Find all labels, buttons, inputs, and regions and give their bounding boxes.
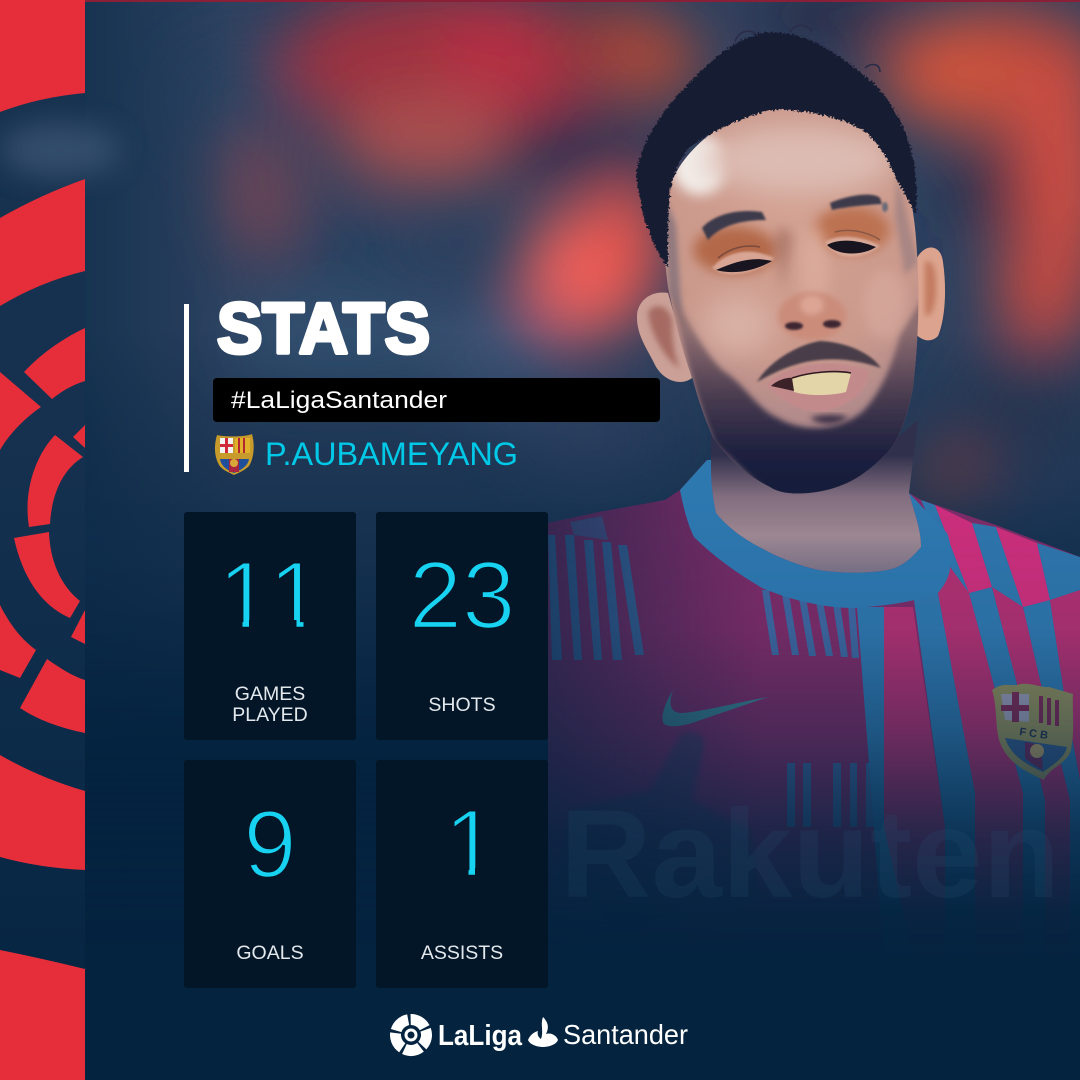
stat card: assists: 1 [444, 790, 497, 897]
stat card: goals: 9 [243, 791, 297, 898]
stat card: games played: PLAYED [232, 704, 308, 726]
title: STATS: STATS [217, 290, 430, 369]
player: neck [711, 420, 921, 573]
stat card: games played: GAMES [235, 683, 305, 705]
player photo: Aubameyang [548, 25, 1080, 980]
wordmark: LaLiga: LaLiga [438, 1020, 523, 1052]
bottom fade over player [85, 500, 1080, 1080]
player: collar [680, 460, 951, 608]
player name: P.AUBAMEYANG [265, 436, 518, 472]
hashtag bar [213, 378, 660, 422]
player: hair [636, 25, 917, 268]
jersey stripes: centre [857, 607, 894, 884]
player: eyes [712, 230, 880, 274]
jersey crest: FC Barcelona: F C B [1019, 726, 1049, 742]
player: left ear [637, 292, 692, 382]
stat card: games played [184, 512, 356, 740]
icon: Santander flame [528, 1017, 558, 1047]
player: eyebrows [702, 195, 888, 240]
header block [184, 290, 660, 475]
stat card: games played: 11 [218, 542, 326, 649]
player: nose [778, 292, 846, 340]
player: head [665, 108, 918, 494]
icon: LaLiga ball [391, 1015, 431, 1055]
white accent bar [184, 304, 189, 472]
jersey: hand ghost [604, 731, 731, 841]
wordmark: Santander: Santander [563, 1019, 688, 1050]
jersey stripes: right shoulder [921, 500, 969, 593]
jersey sponsor text: Rakuten [560, 785, 1060, 924]
stat card: shots [376, 512, 548, 740]
stat card: goals: GOALS [236, 942, 304, 964]
club crest: FC Barcelona [215, 434, 254, 475]
left strip: LaLiga red emblem pattern [0, 0, 120, 1080]
jersey crest: FC Barcelona [992, 684, 1073, 780]
stat card: shots: SHOTS [428, 694, 496, 716]
jersey: nike swoosh [662, 690, 768, 726]
jersey: left side shading [548, 490, 735, 872]
stat card: shots: 23 [409, 542, 515, 649]
stat card: assists [376, 760, 548, 988]
player: jersey [548, 460, 1080, 906]
player: right ear [914, 248, 945, 340]
footer logo: LaLiga Santander [391, 1015, 688, 1055]
player: mouth and moustache [757, 341, 881, 424]
stat card: goals [184, 760, 356, 988]
jersey stripes: left shoulder and chest [548, 516, 874, 827]
stat card: assists: ASSISTS [421, 942, 503, 964]
hashtag bar: #LaLigaSantander [231, 387, 447, 414]
